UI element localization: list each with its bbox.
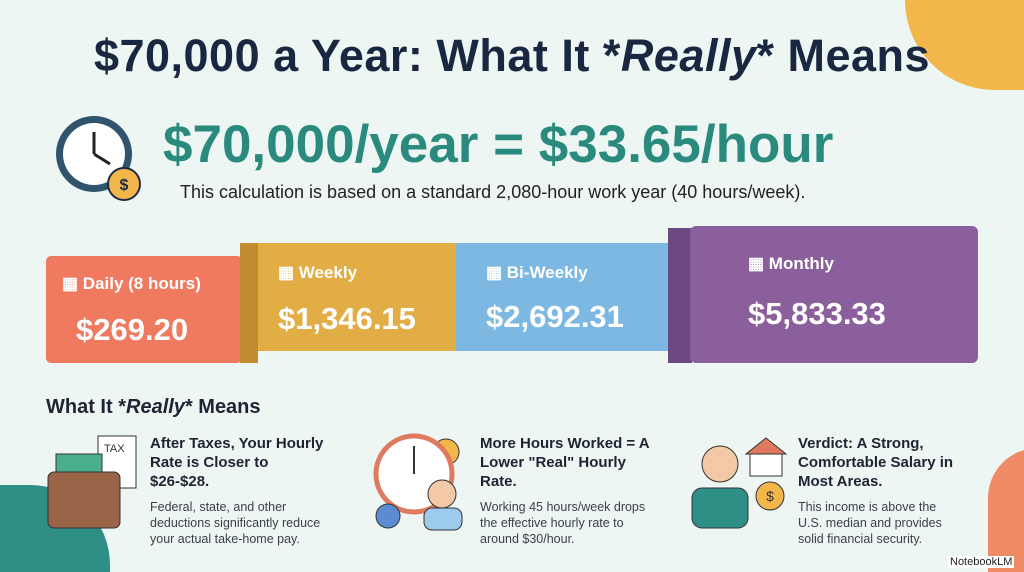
bar: weekly: $1,346.15 <box>278 301 416 336</box>
bar: bi-weekly: ▦ Bi-Weekly <box>486 263 588 282</box>
icon: wallet with tax form: TAX <box>104 443 125 455</box>
bar: monthly <box>690 226 978 363</box>
panel: more hours: Working 45 hours/week drops the effective hourly rate to around $30/hour. <box>480 500 645 546</box>
panel: verdict <box>692 435 953 546</box>
bar: bi-weekly <box>456 243 668 351</box>
3d side <box>240 243 258 363</box>
bar: daily <box>46 256 242 363</box>
panel: taxes: Federal, state, and other deductions significantly reduce your actual take-home pay. <box>150 500 320 546</box>
watermark: NotebookLM <box>950 556 1012 568</box>
icon: clock with coin <box>56 116 141 201</box>
decorative blob bottom right <box>988 448 1024 572</box>
bar: daily: ▦ Daily (8 hours) <box>62 274 201 293</box>
section heading: What It *Really* Means <box>46 396 261 418</box>
headline figure: $70,000/year = $33.65/hour <box>163 115 833 174</box>
panel: taxes: After Taxes, Your Hourly Rate is Closer to $26-$28. <box>150 435 323 490</box>
decorative blob top right <box>905 0 1024 90</box>
icon: clock with tired person <box>374 434 462 530</box>
title: $70,000 a Year: What It *Really* Means <box>94 30 930 81</box>
bar: weekly <box>258 243 456 351</box>
icon: wallet with tax form <box>48 436 136 528</box>
bar: monthly: ▦ Monthly <box>748 254 834 273</box>
icon: clock with coin: $ <box>120 177 129 194</box>
bar: bi-weekly: $2,692.31 <box>486 299 624 334</box>
subtitle: This calculation is based on a standard 2,080-hour work year (40 hours/week). <box>180 182 805 202</box>
bar: monthly: $5,833.33 <box>748 296 886 331</box>
panel: more hours <box>374 434 650 546</box>
icon: smiling person with house and coin <box>692 438 788 528</box>
decorative blob bottom left <box>0 485 110 572</box>
panel: verdict: This income is above the U.S. median and provides solid financial security. <box>798 500 942 546</box>
panel: taxes <box>48 435 324 546</box>
icon: smiling person with house and coin: $ <box>766 488 774 504</box>
panel: more hours: More Hours Worked = A Lower "Real" Hourly Rate. <box>480 435 649 490</box>
panel: verdict: Verdict: A Strong, Comfortable Salary in Most Areas. <box>798 435 953 490</box>
bar: weekly: ▦ Weekly <box>278 263 357 282</box>
bar: daily: $269.20 <box>76 312 188 347</box>
